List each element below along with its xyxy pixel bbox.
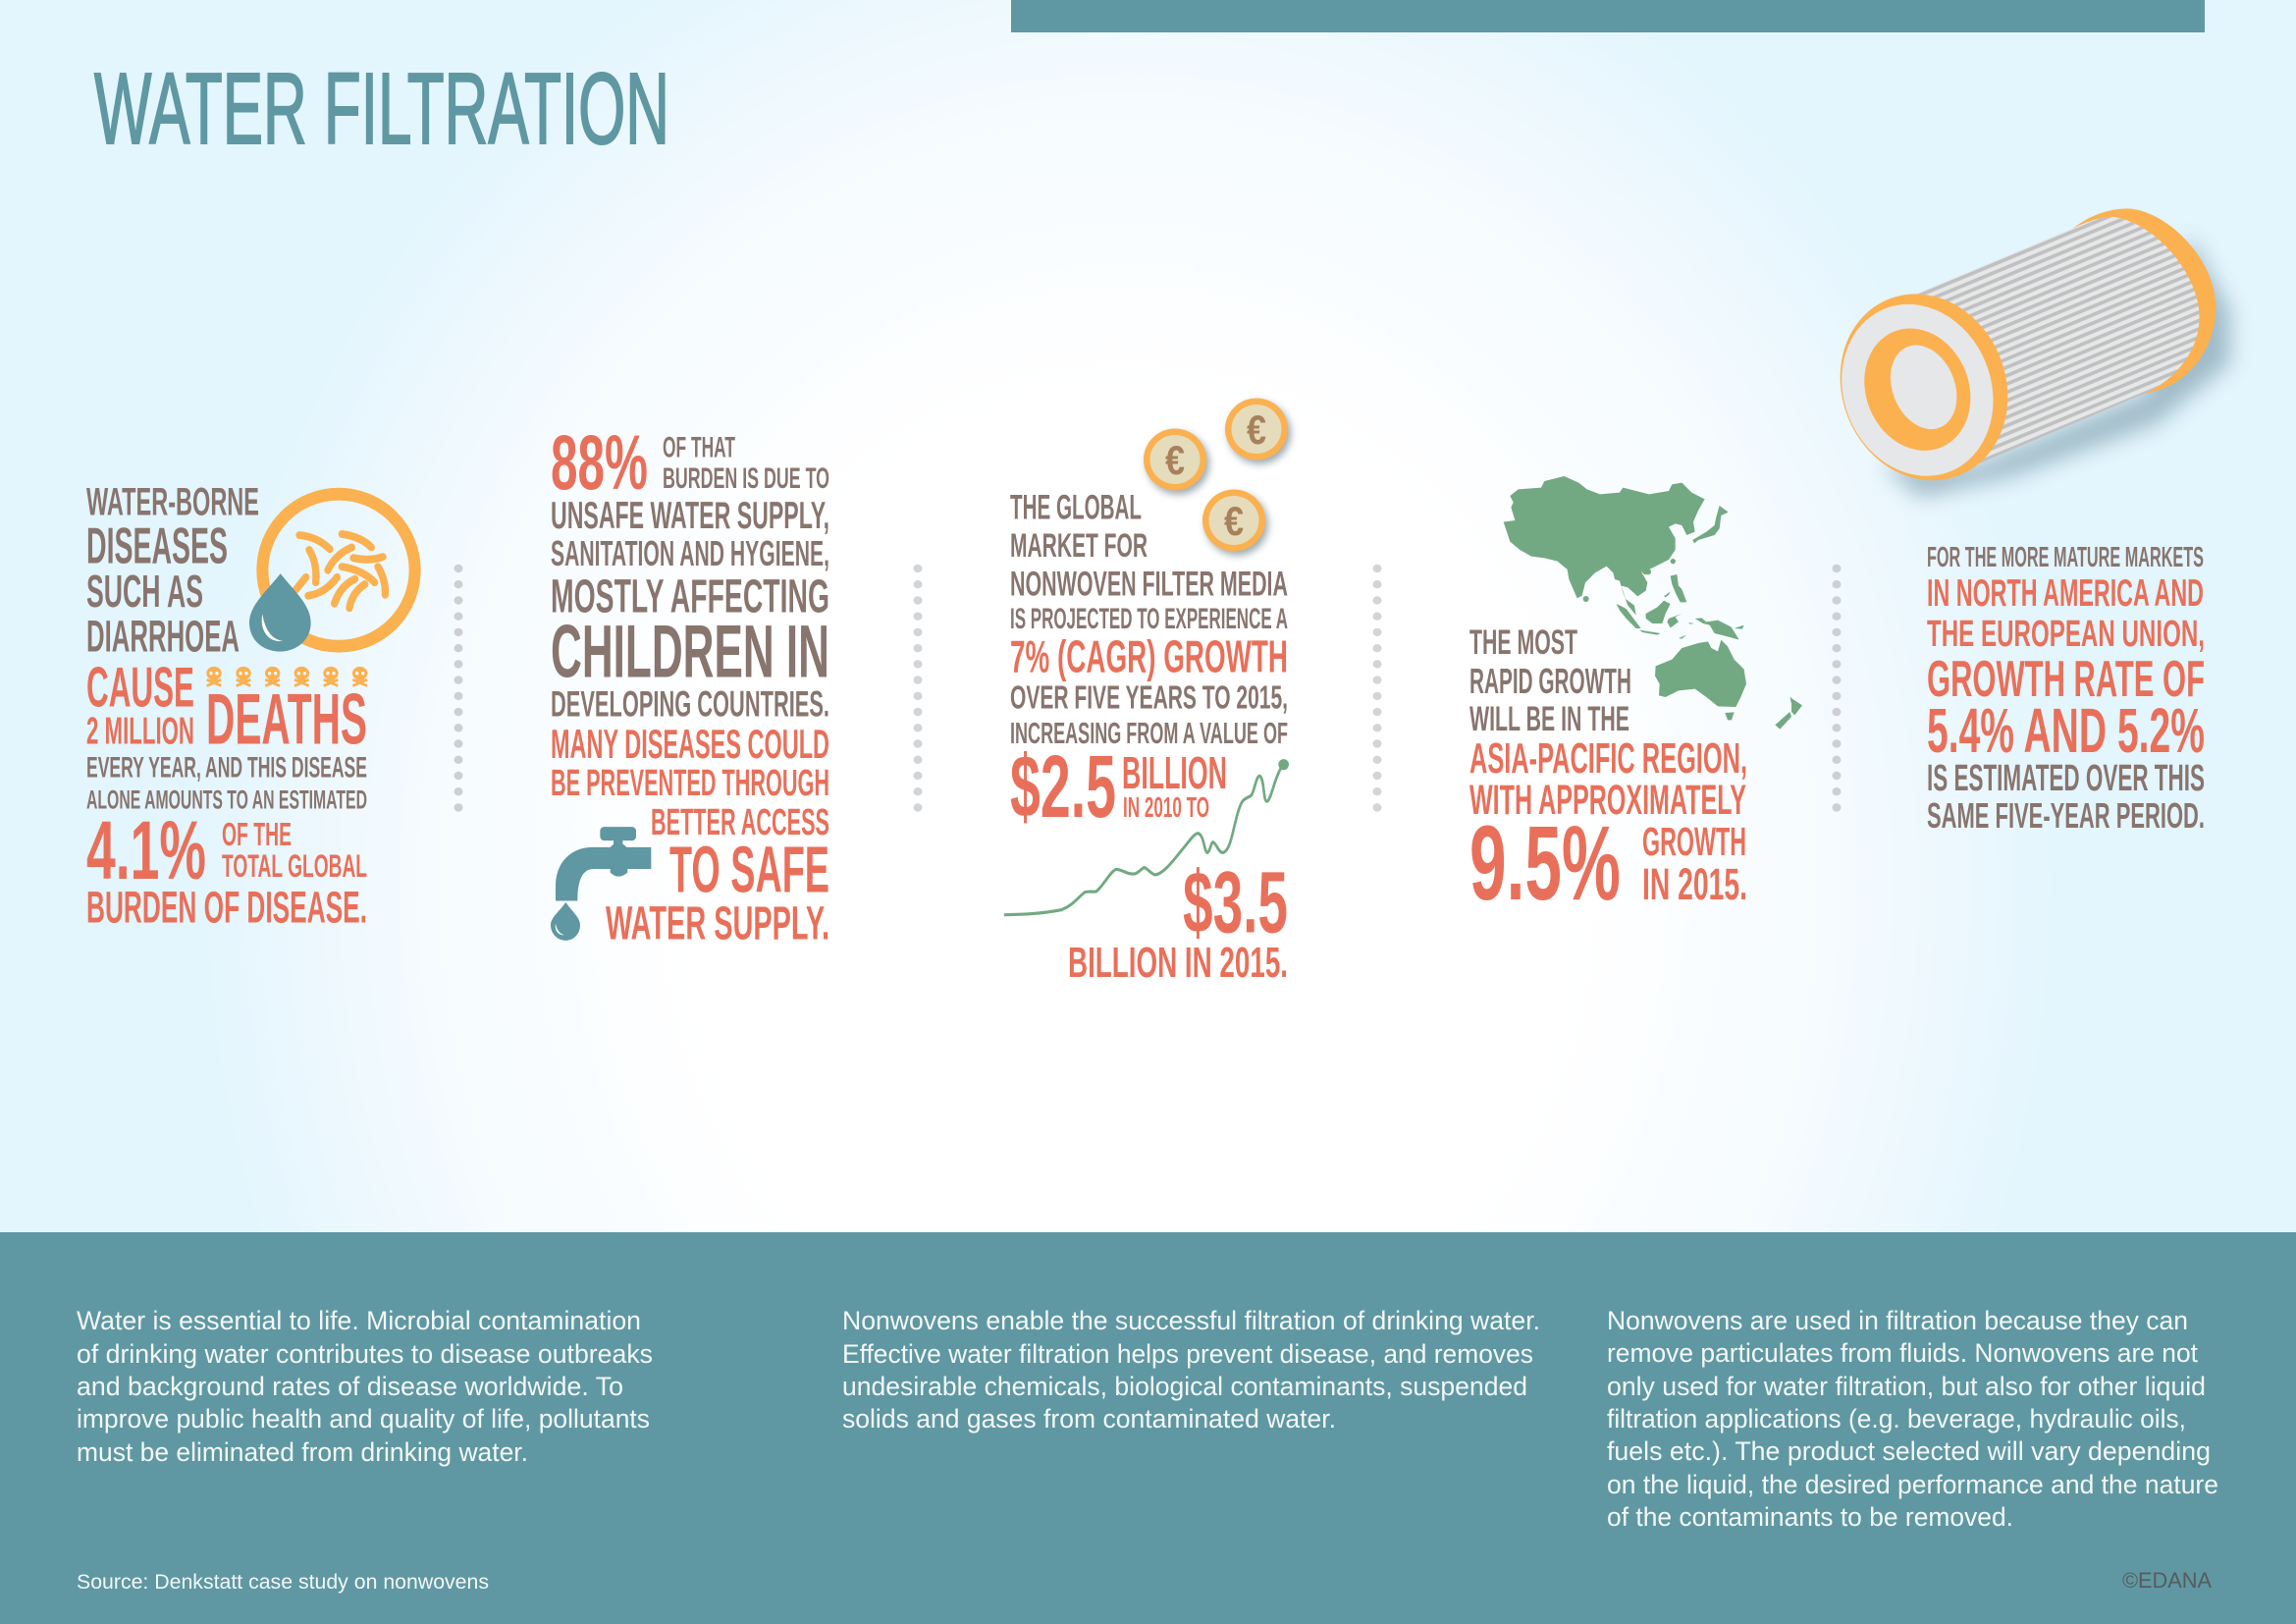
text block: column 3: on the liquid, the desired performance and the nature xyxy=(1607,1470,2218,1499)
text: asia-pacific 9.5% growth: 9.5% xyxy=(1469,804,1621,922)
text: north america growth rates xyxy=(1927,572,2205,766)
panel: unsafe water supply xyxy=(551,419,829,949)
footer panel xyxy=(0,1232,2296,1624)
text block: column 1: must be eliminated from drinking water. xyxy=(77,1437,528,1467)
text: unsafe water supply, children: MOSTLY AFFECTING xyxy=(551,571,829,623)
text: water-borne diseases such as diarrhoea: SUCH AS xyxy=(86,566,203,617)
icon: euro coins: € xyxy=(1165,437,1185,483)
text block: column 2: undesirable chemicals, biological contaminants, suspended xyxy=(842,1372,1527,1401)
icon: euro coins: € xyxy=(1247,406,1266,453)
text: water-borne diseases such as diarrhoea: DISEASES xyxy=(86,517,228,574)
text block: column 2: Nonwovens enable the successful filtration of drinking water. xyxy=(842,1306,1540,1335)
text: the most rapid growth: WILL BE IN THE xyxy=(1469,700,1629,738)
dotted divider 1 xyxy=(454,565,463,812)
text: is estimated over this xyxy=(1927,758,2205,836)
copyright: ©EDANA xyxy=(2122,1568,2212,1593)
text: 4.1% of the total global burden: 4.1% xyxy=(86,804,206,896)
text block: column 1 xyxy=(77,1306,653,1467)
text block: column 3: Nonwovens are used in filtration because they can xyxy=(1607,1306,2188,1335)
text: cause 2 million deaths: CAUSE xyxy=(86,656,194,719)
text block: column 2 xyxy=(842,1306,1540,1434)
text: 88% of that burden: OF THAT xyxy=(663,432,735,464)
text: the global market: THE GLOBAL xyxy=(1010,487,1142,526)
text: the most rapid growth: RAPID GROWTH xyxy=(1469,661,1631,701)
text: asia-pacific 9.5% growth: IN 2015. xyxy=(1642,859,1747,909)
icon: euro coins: € xyxy=(1224,498,1244,544)
text: the global market: NONWOVEN FILTER MEDIA xyxy=(1010,564,1288,603)
panel: global market xyxy=(1005,399,1291,987)
text: the global market: IS PROJECTED TO EXPERIENCE A xyxy=(1010,603,1288,635)
text: $2.5 billion to $3.5 billion: IN 2010 TO xyxy=(1123,792,1209,824)
text: the most rapid growth: THE MOST xyxy=(1469,623,1577,662)
text: water-borne diseases such as diarrhoea: WATER-BORNE xyxy=(86,481,259,524)
text: 88% of that burden xyxy=(551,419,829,506)
text: over five years: INCREASING FROM A VALUE OF xyxy=(1010,717,1288,750)
text: every year: ALONE AMOUNTS TO AN ESTIMATED xyxy=(86,785,367,815)
text: $2.5 billion to $3.5 billion: BILLION xyxy=(1122,747,1227,798)
panel: mature markets xyxy=(1927,542,2205,836)
text block: column 3: of the contaminants to be removed. xyxy=(1607,1502,2013,1532)
panel: water-borne diseases xyxy=(86,481,415,933)
text: over five years: OVER FIVE YEARS TO 2015, xyxy=(1010,679,1288,716)
text: asia-pacific 9.5% growth xyxy=(1469,735,1747,922)
text block: column 3 xyxy=(1607,1306,2218,1532)
text: water-borne diseases such as diarrhoea xyxy=(86,481,259,662)
text block: column 1: and background rates of disease worldwide. To xyxy=(77,1372,623,1401)
icon: euro coins xyxy=(1144,399,1291,556)
icon: bacteria in circle with water drop xyxy=(249,494,415,652)
text: every year xyxy=(86,751,367,815)
text: $2.5 billion to $3.5 billion xyxy=(1010,738,1288,987)
text: the most rapid growth xyxy=(1469,623,1631,738)
chart: growth line xyxy=(1005,759,1289,915)
text: many diseases could be prevented: TO SAFE xyxy=(669,835,829,907)
text: 88% of that burden: 88% xyxy=(551,419,648,506)
text: 4.1% of the total global burden: OF THE xyxy=(222,817,292,853)
text: 4.1% of the total global burden: TOTAL GLOBAL xyxy=(222,847,367,884)
text: unsafe water supply, children: CHILDREN IN xyxy=(551,611,829,694)
text: the global market xyxy=(1010,487,1288,635)
text: 7% CAGR growth: 7% (CAGR) GROWTH xyxy=(1010,631,1288,682)
icons: skulls xyxy=(206,667,367,686)
text block: column 2: Effective water filtration helps prevent disease, and removes xyxy=(842,1339,1533,1369)
text block: column 3: filtration applications (e.g. beverage, hydraulic oils, xyxy=(1607,1404,2186,1434)
icon: tap with drop xyxy=(551,827,651,941)
text block: column 1: improve public health and quality of life, pollutants xyxy=(77,1404,650,1434)
top bar xyxy=(1011,0,2205,32)
text: unsafe water supply, children: SANITATION AND HYGIENE, xyxy=(551,533,829,573)
text: many diseases could be prevented: WATER SUPPLY. xyxy=(606,897,829,949)
text block: column 3: fuels etc.). The product selected will vary depending xyxy=(1607,1436,2211,1466)
text: unsafe water supply, children: UNSAFE WATER SUPPLY, xyxy=(551,495,829,537)
text block: column 1: of drinking water contributes to disease outbreaks xyxy=(77,1339,653,1369)
text: over five years xyxy=(1010,679,1288,750)
text: unsafe water supply, children: DEVELOPING COUNTRIES. xyxy=(551,683,829,725)
text: unsafe water supply, children xyxy=(551,495,829,725)
text: the global market: MARKET FOR xyxy=(1010,527,1148,565)
panel: asia-pacific xyxy=(1469,476,1802,922)
text: $2.5 billion to $3.5 billion: BILLION IN 2015. xyxy=(1068,940,1288,987)
text: cause 2 million deaths: DEATHS xyxy=(206,677,367,760)
icon: map of asia-pacific xyxy=(1504,476,1802,730)
text block: column 1: Water is essential to life. Microbial contamination xyxy=(77,1306,641,1335)
dotted divider 2 xyxy=(913,565,923,812)
text: cause 2 million deaths xyxy=(86,656,367,760)
text: 88% of that burden: BURDEN IS DUE TO xyxy=(663,462,829,495)
text block: column 3: only used for water filtration, but also for other liquid xyxy=(1607,1372,2206,1401)
illustration: water filter cartridge xyxy=(1813,208,2230,506)
text: $2.5 billion to $3.5 billion: $2.5 xyxy=(1010,738,1116,837)
dotted divider 3 xyxy=(1372,565,1382,812)
text: 4.1% of the total global burden xyxy=(86,804,367,933)
text: asia-pacific 9.5% growth: WITH APPROXIMATELY xyxy=(1469,777,1746,823)
text: many diseases could be prevented xyxy=(551,721,829,949)
text: every year: EVERY YEAR, AND THIS DISEASE xyxy=(86,751,367,784)
text block: column 2: solids and gases from contaminated water. xyxy=(842,1404,1336,1434)
text: many diseases could be prevented: MANY DISEASES COULD xyxy=(551,721,829,767)
text: asia-pacific 9.5% growth: GROWTH xyxy=(1642,819,1746,864)
dotted divider 4 xyxy=(1832,565,1842,812)
title: WATER FILTRATION xyxy=(94,52,669,165)
text: asia-pacific 9.5% growth: ASIA-PACIFIC REGION, xyxy=(1469,735,1747,783)
text block: column 3: remove particulates from fluids. Nonwovens are not xyxy=(1607,1338,2199,1368)
text: many diseases could be prevented: BE PREVENTED THROUGH xyxy=(551,763,829,804)
text: 4.1% of the total global burden: BURDEN OF DISEASE. xyxy=(86,883,367,933)
text: water-borne diseases such as diarrhoea: DIARRHOEA xyxy=(86,612,240,662)
text: many diseases could be prevented: BETTER ACCESS xyxy=(651,802,829,843)
source note: Source: Denkstatt case study on nonwovens xyxy=(77,1571,489,1594)
text: cause 2 million deaths: 2 MILLION xyxy=(86,711,194,752)
text: $2.5 billion to $3.5 billion: $3.5 xyxy=(1183,852,1288,950)
